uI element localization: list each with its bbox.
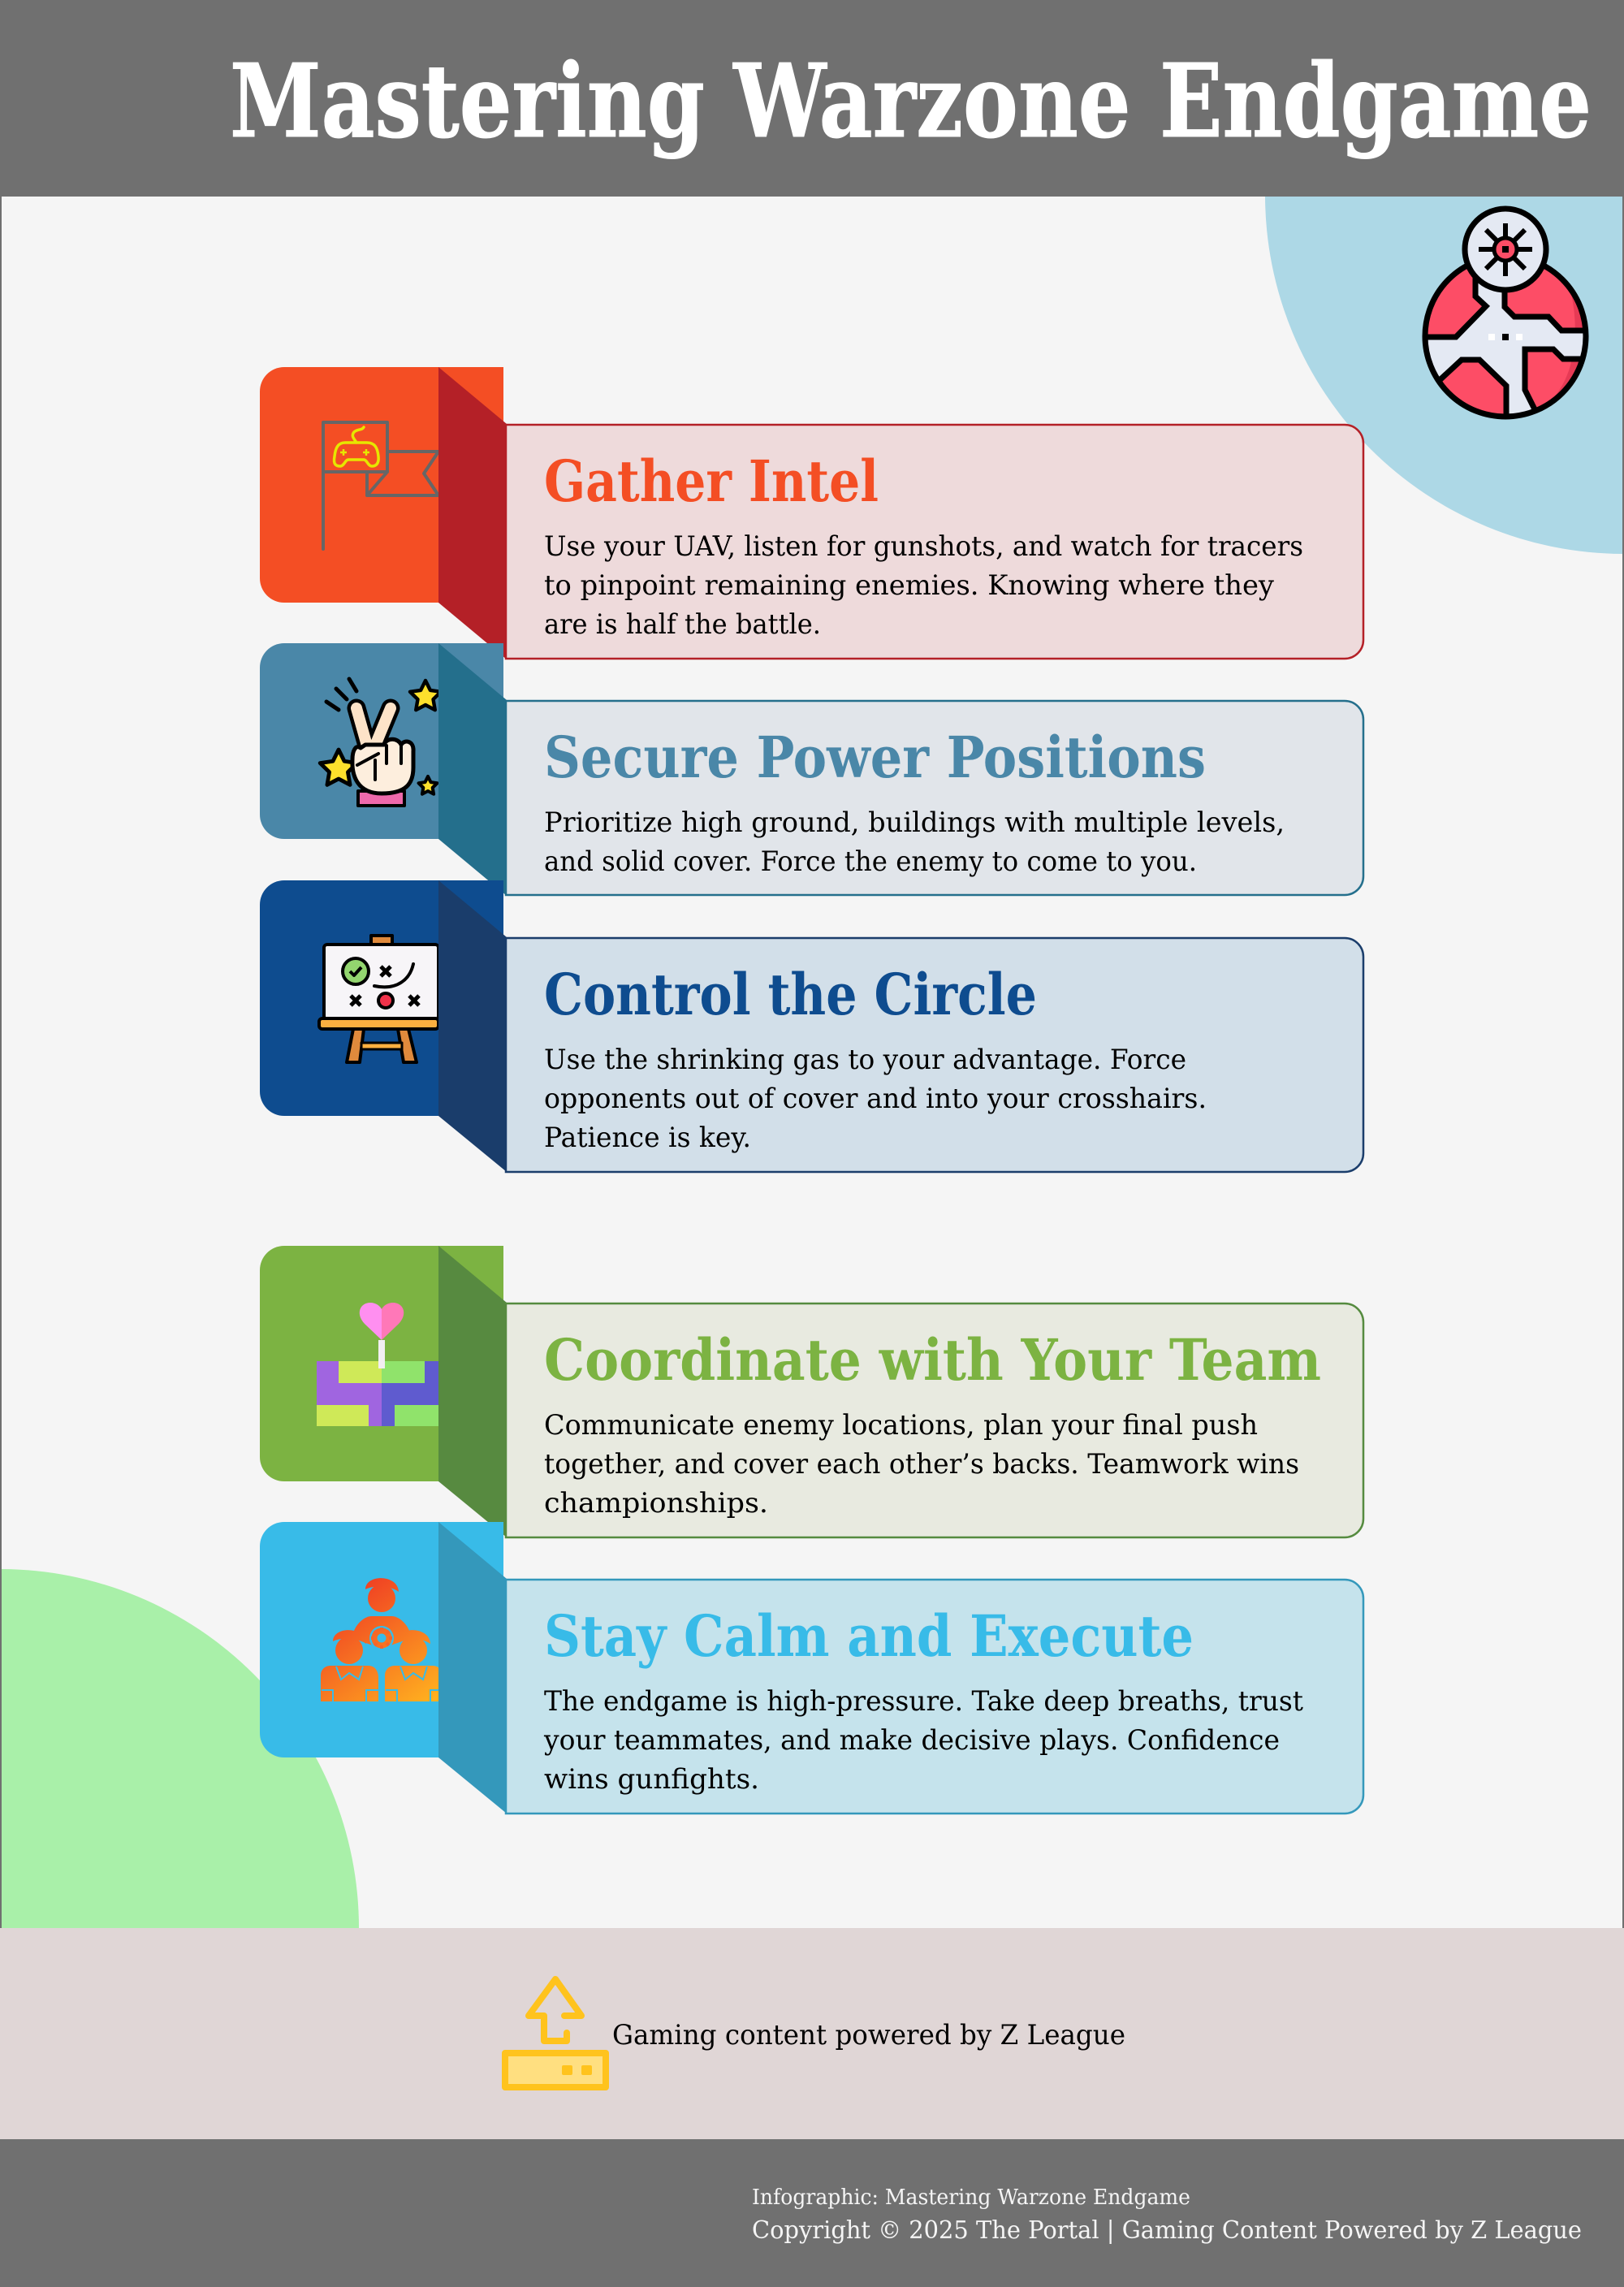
icon: team of three with gear (321, 1578, 443, 1701)
fold (438, 1246, 507, 1537)
body text (544, 806, 1285, 878)
body text: championships. (544, 1487, 768, 1520)
body text: your teammates, and make decisive plays. Confidence (543, 1724, 1280, 1757)
card: Gather Intel (260, 367, 1363, 659)
body text (544, 1044, 1207, 1154)
footer title: Infographic: Mastering Warzone Endgame (752, 2185, 1190, 2210)
body text: are is half the battle. (544, 608, 821, 641)
icon tile (260, 880, 503, 1116)
icon tile (260, 1522, 503, 1757)
text panel (506, 425, 1363, 659)
icon: flag with game controller (323, 422, 438, 549)
body text (544, 1409, 1299, 1520)
icon: joystick with heart (317, 1303, 438, 1426)
text panel (506, 938, 1363, 1172)
heading: Control the Circle (544, 961, 1037, 1028)
header band (0, 0, 1624, 197)
text panel (506, 701, 1363, 895)
icon: globe with virus marker (1417, 209, 1590, 422)
card: Control the Circle (260, 880, 1363, 1172)
body text: together, and cover each other’s backs. Teamwork wins (544, 1448, 1299, 1481)
body text: Use your UAV, listen for gunshots, and watch for tracers (544, 530, 1303, 563)
fold (438, 1522, 507, 1814)
body text: Communicate enemy locations, plan your final push (544, 1409, 1258, 1442)
fold (438, 880, 507, 1172)
fold (438, 367, 507, 659)
text panel (506, 1303, 1363, 1537)
body text: Patience is key. (544, 1122, 751, 1154)
icon tile (260, 367, 503, 603)
heading: Gather Intel (544, 447, 879, 515)
body text: Use the shrinking gas to your advantage. Force (544, 1044, 1186, 1076)
sponsor band (0, 1928, 1624, 2139)
icon tile (260, 1246, 503, 1481)
card: Coordinate with Your Team (260, 1246, 1363, 1537)
body text (543, 1685, 1303, 1796)
body text: and solid cover. Force the enemy to come to you. (544, 845, 1197, 878)
copyright: Copyright © 2025 The Portal | Gaming Content Powered by Z League (752, 2216, 1582, 2245)
body text: to pinpoint remaining enemies. Knowing where they (544, 569, 1275, 602)
icon: peace hand and stars (320, 679, 441, 806)
body text: The endgame is high-pressure. Take deep breaths, trust (544, 1685, 1303, 1718)
footer band (0, 2139, 1624, 2287)
heading: Secure Power Positions (544, 724, 1206, 791)
body text (544, 530, 1303, 641)
body text: Prioritize high ground, buildings with multiple levels, (544, 806, 1285, 839)
sponsor text: Gaming content powered by Z League (612, 2019, 1125, 2051)
body text: opponents out of cover and into your crosshairs. (544, 1083, 1207, 1115)
card: Stay Calm and Execute (260, 1522, 1363, 1814)
card: Secure Power Positions (260, 643, 1363, 896)
icon: tactics board on easel (319, 936, 438, 1062)
icon tile (260, 643, 503, 839)
icon: upload arrow and device (505, 1979, 606, 2087)
fold (438, 643, 507, 896)
heading: Stay Calm and Execute (544, 1602, 1194, 1670)
text panel (506, 1580, 1363, 1814)
heading: Coordinate with Your Team (544, 1326, 1321, 1394)
body text: wins gunfights. (544, 1763, 759, 1796)
background circle: blue (1265, 197, 1622, 554)
background circle: green (2, 1569, 359, 1928)
